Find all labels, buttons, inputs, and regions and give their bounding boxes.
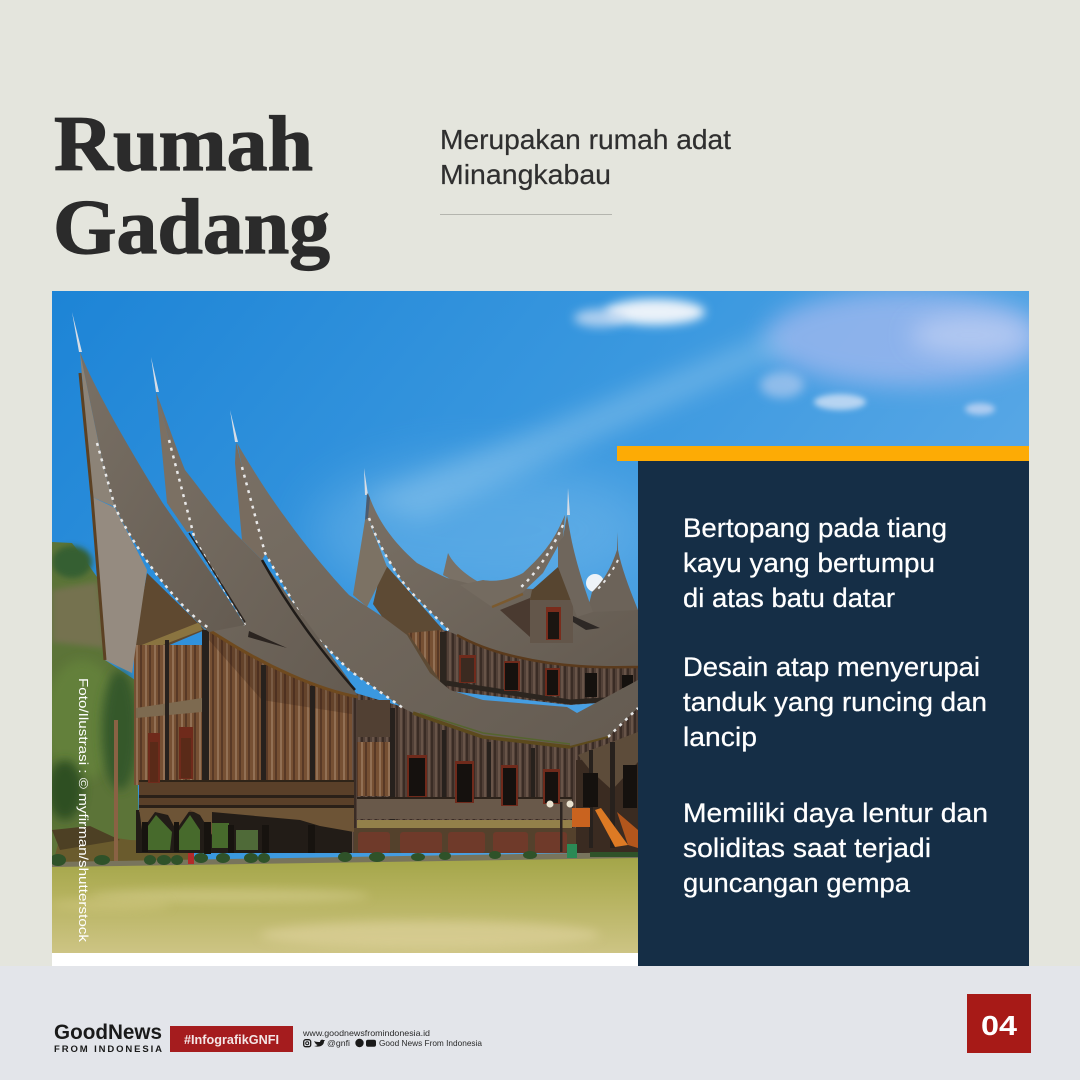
icon: youtube (366, 1040, 376, 1047)
fire hydrant (188, 853, 194, 864)
title (53, 100, 330, 270)
contact and social links: www.goodnewsfromindonesia.id (302, 1028, 430, 1038)
far back horn (443, 553, 478, 584)
hashtag badge: #InfografikGNFI (184, 1033, 279, 1047)
windows (148, 655, 560, 806)
page number: 04 (981, 1010, 1017, 1041)
photo credit: Foto/Ilustrasi : © myfirman/shutterstock (76, 678, 91, 943)
point 2: tanduk yang runcing dan (683, 687, 987, 717)
foundation panels (354, 828, 576, 853)
roof three (230, 410, 638, 747)
hill and trees (44, 542, 192, 866)
info panel (617, 446, 1029, 966)
title: Gadang (53, 183, 330, 270)
subtitle: Minangkabau (440, 159, 611, 190)
point 2: Desain atap menyerupai (683, 652, 980, 682)
left wall (134, 645, 202, 785)
spike (364, 468, 368, 495)
point 2: lancip (683, 722, 757, 752)
upper right roof surface (368, 493, 638, 667)
icon: instagram (304, 1040, 311, 1047)
stairs, lamp and bin (546, 800, 638, 858)
point 3: soliditas saat terjadi (683, 833, 931, 863)
roof two (151, 357, 358, 697)
point 3 (683, 798, 988, 898)
point 1: di atas batu datar (683, 583, 895, 613)
point 1: kayu yang bertumpu (683, 548, 935, 578)
gold band (357, 820, 572, 828)
upper storey wall (441, 630, 638, 705)
logo: GoodNews From Indonesia: GoodNews (54, 1021, 162, 1044)
photo: Rumah Gadang house under blue sky (44, 290, 1045, 953)
gable ornament (136, 573, 205, 645)
roof one (72, 312, 245, 673)
stilts (142, 822, 315, 854)
house body and walls (132, 562, 638, 854)
upper eave (457, 635, 638, 667)
balcony rail (357, 798, 572, 819)
icon: twitter (314, 1040, 325, 1047)
subtitle (440, 124, 731, 190)
footer band (0, 966, 1080, 1080)
point 1 (683, 513, 947, 613)
right horn (590, 532, 638, 612)
page number (967, 994, 1031, 1053)
under-floor space (136, 810, 358, 853)
logo: GoodNews From Indonesia (54, 1021, 162, 1055)
main long wall (209, 632, 352, 780)
subtitle: Merupakan rumah adat (440, 124, 731, 155)
lower right wall (352, 692, 638, 853)
title: Rumah (54, 100, 313, 187)
hashtag badge (170, 1026, 293, 1052)
grass lawn (52, 857, 638, 953)
navy panel background (638, 461, 1029, 966)
orange accent bar (617, 446, 1029, 461)
right end dark porch (576, 760, 638, 853)
white strip under photo (52, 953, 638, 966)
posts (165, 630, 615, 848)
point 3: guncangan gempa (683, 868, 911, 898)
contact and social links (302, 1028, 482, 1048)
back roofs and dormer (353, 468, 638, 667)
contact and social links: @gnfi (327, 1038, 350, 1048)
dormer (500, 598, 530, 637)
silver ridge (369, 518, 450, 632)
point 3: Memiliki daya lentur dan (683, 798, 988, 828)
contact and social links: Good News From Indonesia (379, 1038, 482, 1048)
base beams (139, 780, 354, 812)
utility pole (114, 720, 118, 870)
logo: GoodNews From Indonesia: FROM INDONESIA (54, 1044, 162, 1055)
point 2 (683, 652, 987, 752)
hedges and garden (50, 851, 640, 867)
icon: facebook (355, 1039, 364, 1047)
point 1: Bertopang pada tiang (683, 513, 947, 543)
gable underside (353, 518, 387, 607)
right gable face (373, 566, 444, 682)
